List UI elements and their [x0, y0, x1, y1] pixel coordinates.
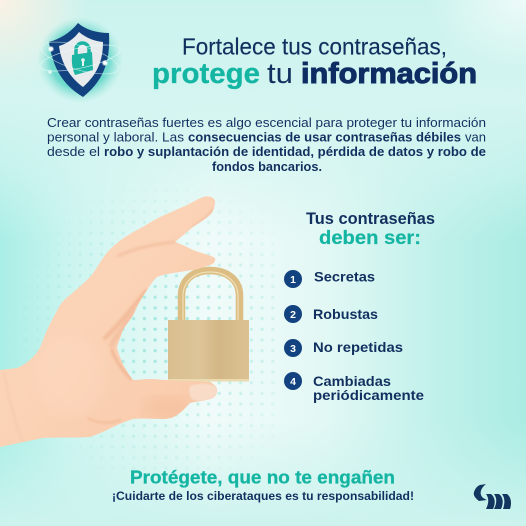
intro paragraph: personal y laboral. Las [47, 130, 184, 144]
list item 1: 1 [290, 274, 296, 286]
hand [0, 196, 217, 447]
title: información [301, 58, 477, 90]
title: protege [152, 58, 260, 90]
heading: tus contraseñas deben ser [306, 210, 435, 249]
palm highlight [34, 333, 106, 417]
footer slogan: Protégete, que no te engañen [130, 466, 395, 488]
icon: brand logo [474, 484, 511, 509]
padlock [168, 270, 249, 382]
intro paragraph: desde el [47, 144, 100, 159]
intro paragraph: van [465, 130, 486, 144]
heading: tus contraseñas deben ser: Tus contraseñas [306, 210, 435, 228]
title [152, 34, 477, 90]
list item 4 [284, 372, 424, 403]
list item 3 [284, 339, 403, 357]
list item 3: No repetidas [313, 339, 403, 355]
list item 4: 4 [290, 376, 296, 388]
list item 2: 2 [290, 309, 296, 321]
list item 1: Secretas [314, 268, 375, 284]
list item 3: 3 [290, 343, 296, 355]
intro paragraph [47, 115, 486, 174]
thumb tone [150, 400, 187, 418]
title: Fortalece tus contraseñas, [182, 34, 447, 60]
list item 1 [284, 268, 375, 288]
intro paragraph: consecuencias de usar contraseñas débiles [188, 130, 461, 144]
icon: shield with padlock [37, 17, 123, 103]
heading: tus contraseñas deben ser: deben ser: [319, 227, 421, 249]
thumb nail [189, 384, 217, 401]
list item 4: periódicamente [313, 387, 424, 403]
hand shading [88, 208, 214, 424]
intro paragraph: fondos bancarios. [212, 159, 322, 174]
intro paragraph: Crear contraseñas fuertes es algo escencial para proteger tu información [47, 115, 486, 130]
footer slogan: ¡Cuidarte de los ciberataques es tu responsabilidad! [112, 491, 414, 503]
title: tu [267, 58, 293, 90]
list item 2 [284, 305, 378, 323]
photo: hand holding padlock [0, 190, 249, 455]
list item 4: Cambiadas [313, 373, 391, 389]
list item 2: Robustas [313, 306, 378, 322]
footer slogan [112, 466, 414, 503]
intro paragraph: robo y suplantación de identidad, pérdida de datos y robo de [104, 144, 486, 159]
